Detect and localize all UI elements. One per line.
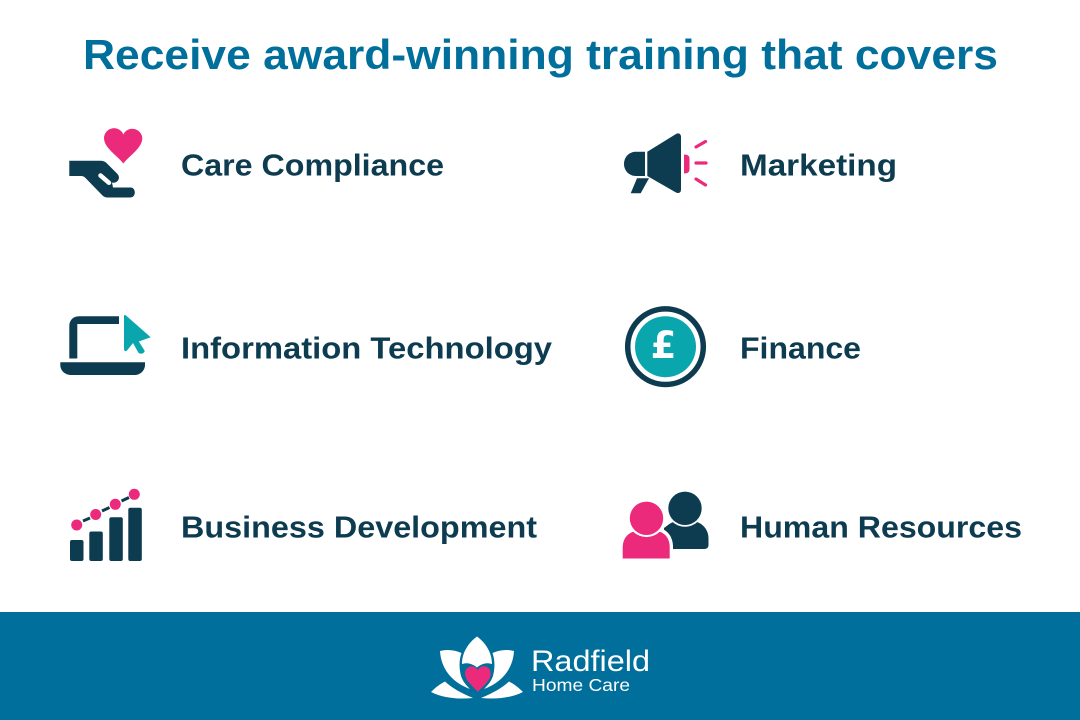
icon: pound coin bbox=[628, 309, 703, 385]
item: care compliance bbox=[69, 128, 444, 198]
item: information technology bbox=[60, 315, 552, 375]
icon: two people bbox=[620, 490, 708, 564]
label: finance: Finance bbox=[740, 332, 861, 366]
logo: lotus with heart bbox=[431, 636, 523, 699]
title: Receive award-winning training that covers bbox=[83, 31, 998, 78]
label: business development: Business Development bbox=[181, 510, 537, 544]
icon: laptop with cursor bbox=[60, 315, 151, 375]
icon: heart in hand bbox=[69, 128, 142, 198]
label: marketing: Marketing bbox=[740, 148, 897, 182]
icon: megaphone bbox=[624, 133, 706, 193]
logo wordmark: Radfield bbox=[531, 645, 650, 678]
item: finance bbox=[628, 309, 861, 385]
label: human resources: Human Resources bbox=[740, 510, 1022, 544]
item: human resources bbox=[620, 490, 1022, 564]
logo wordmark bbox=[531, 645, 650, 695]
icon: bar chart with trend line bbox=[70, 489, 142, 561]
item: business development bbox=[70, 489, 537, 561]
label: information technology: Information Technology bbox=[181, 332, 552, 366]
item: marketing bbox=[624, 133, 897, 193]
label: care compliance: Care Compliance bbox=[181, 148, 444, 182]
logo wordmark: Home Care bbox=[532, 675, 630, 695]
footer band bbox=[0, 612, 1080, 720]
icon: pound coin: £ bbox=[651, 324, 676, 367]
